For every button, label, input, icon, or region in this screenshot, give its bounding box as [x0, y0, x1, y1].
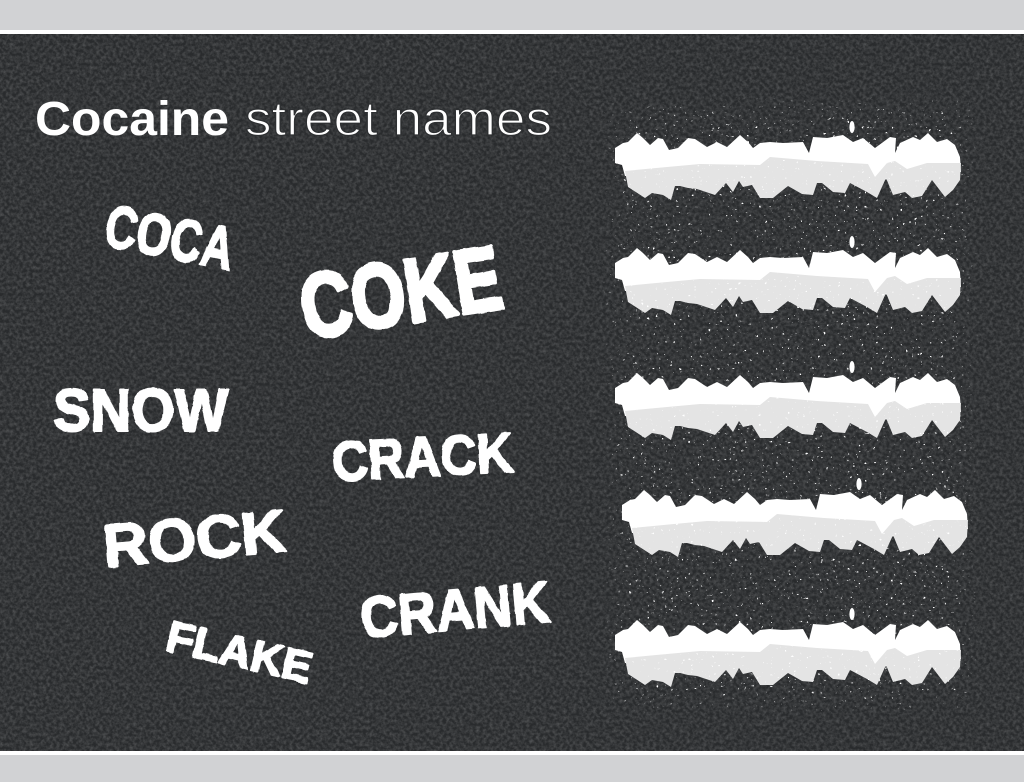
top band: [0, 0, 1024, 30]
street names: [53, 194, 553, 693]
word: flake: FLAKE: [162, 612, 317, 693]
word: rock: ROCK: [100, 497, 288, 580]
cocaine lines: [600, 95, 980, 715]
bottom white rule: [0, 751, 1024, 755]
line 1: [615, 121, 961, 200]
bottom band: [0, 755, 1024, 782]
title: [35, 93, 552, 146]
word: crank: CRANK: [357, 570, 553, 651]
top white rule: [0, 30, 1024, 34]
line 4: [622, 478, 968, 557]
line 5: [615, 608, 961, 687]
word: crack: CRACK: [330, 421, 514, 493]
word: coke: COKE: [293, 226, 509, 358]
title: street names: [245, 93, 552, 146]
line 3: [615, 361, 961, 440]
word: snow: SNOW: [53, 377, 228, 444]
powder specks: [600, 95, 980, 715]
line 2: [615, 236, 961, 315]
word: coca: COCA: [99, 194, 240, 283]
title: Cocaine: [35, 93, 229, 146]
